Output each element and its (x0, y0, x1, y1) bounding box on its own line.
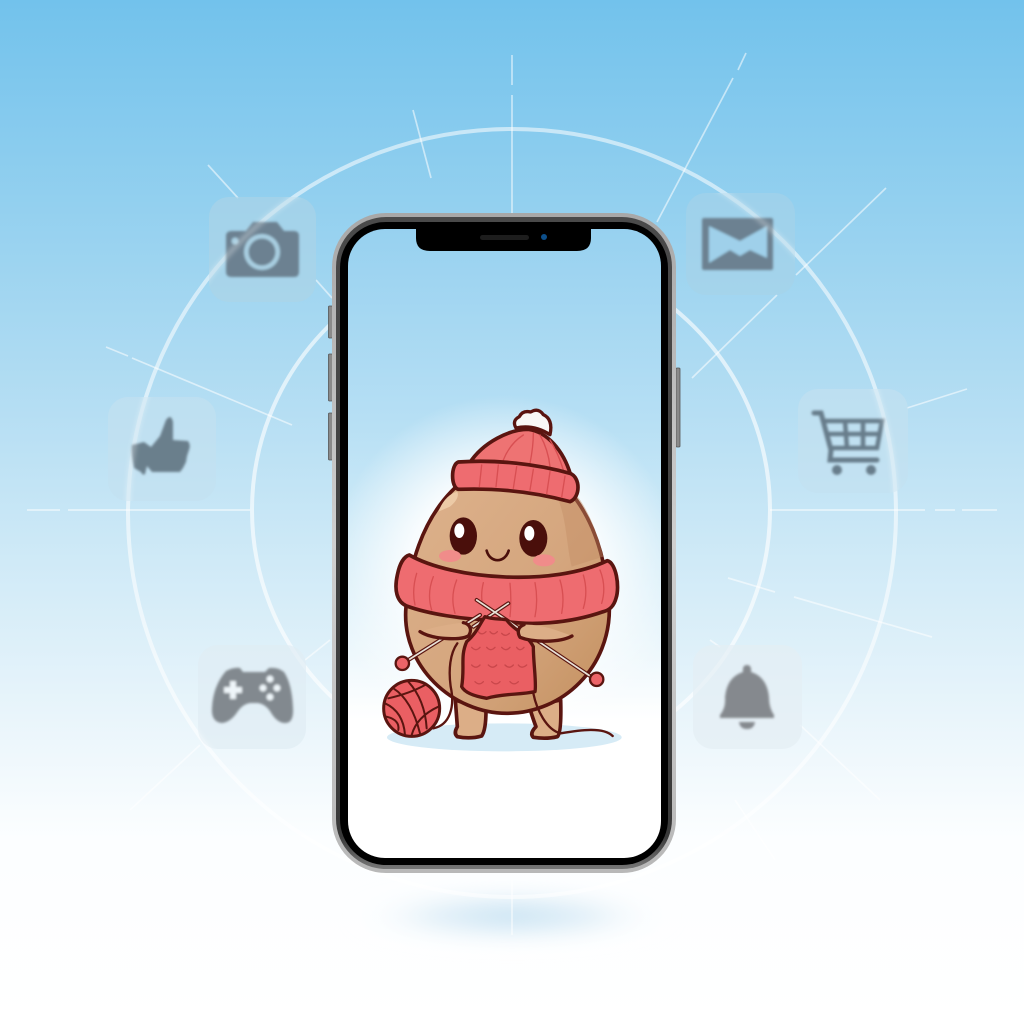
body (406, 460, 609, 713)
icon tile: shopping cart (798, 389, 908, 493)
knitting potato character (384, 410, 622, 751)
phone ground shadow (347, 888, 677, 944)
swatch stitches (472, 632, 527, 684)
body highlight (438, 492, 458, 512)
smile (487, 551, 509, 560)
body shading (558, 493, 603, 567)
metal frame (332, 213, 676, 873)
outer ring (128, 129, 896, 897)
icon tile: bell (693, 645, 802, 749)
yarn trail (433, 643, 613, 736)
speaker (480, 235, 529, 240)
knitted swatch (462, 617, 535, 698)
icon tile: mail (686, 193, 795, 295)
cheeks (439, 550, 555, 566)
band ribs (479, 465, 565, 497)
ring glimpsed through frosted tiles (126, 193, 898, 501)
hat band (453, 461, 578, 502)
inner ring (252, 251, 770, 769)
icon tile: game controller (198, 645, 306, 749)
side buttons (328, 306, 680, 460)
needles (396, 600, 603, 686)
legs (455, 700, 561, 738)
icon tile: camera (209, 197, 316, 302)
hat ribs (503, 433, 563, 470)
smartphone (328, 213, 680, 873)
icon tile: thumbs up (108, 397, 216, 501)
camera (541, 234, 547, 240)
screen (348, 229, 661, 858)
hat dome (469, 429, 571, 475)
screen glow (348, 395, 661, 745)
scarf ribs (414, 570, 604, 617)
ground shadow (387, 723, 622, 751)
notch (416, 227, 591, 251)
eyes (450, 517, 547, 557)
yarn ball (384, 680, 440, 736)
arms (420, 623, 572, 641)
scarf (396, 555, 618, 623)
pom pom (514, 410, 551, 435)
